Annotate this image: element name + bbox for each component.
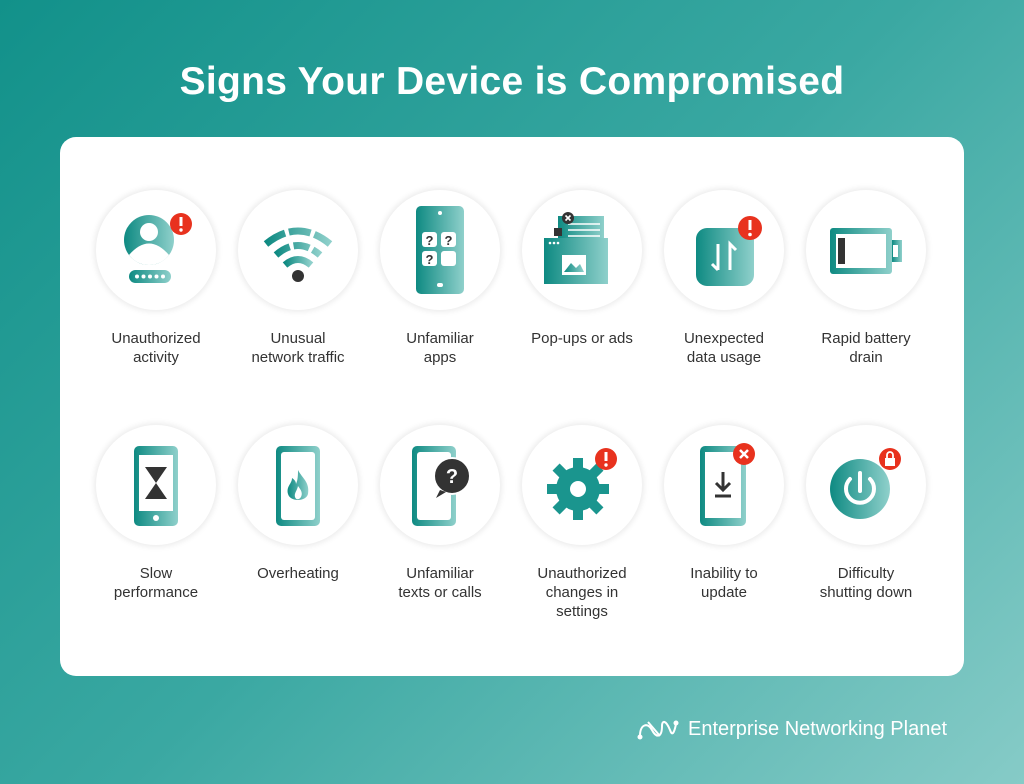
- item: difficulty shutting down: [804, 422, 928, 601]
- item: slow performance: Slow: [140, 565, 172, 582]
- item: unfamiliar apps: apps: [424, 349, 456, 366]
- logo: Enterprise Networking Planet: [688, 718, 947, 740]
- item: unexpected data usage: [662, 188, 786, 366]
- item: slow performance: [94, 422, 218, 601]
- item: unusual network traffic: [236, 188, 360, 366]
- item: unexpected data usage: Unexpected: [684, 330, 764, 347]
- item: settings: [520, 422, 644, 620]
- panel: signs: [60, 137, 964, 676]
- item: unfamiliar apps: ?: [426, 252, 434, 267]
- item: pop-ups: Pop-ups or ads: [531, 330, 633, 347]
- item: unexpected data usage: data usage: [687, 349, 761, 366]
- item: unusual network traffic: Unusual: [270, 330, 326, 347]
- item: overheating: Overheating: [257, 565, 339, 582]
- item: unfamiliar apps: ?: [426, 233, 434, 248]
- item: overheating: [236, 422, 360, 582]
- item: settings: settings: [556, 603, 608, 620]
- item: battery drain: [804, 188, 928, 366]
- item: unfamiliar texts: ?: [446, 466, 458, 488]
- item: inability to update: Inability to: [690, 565, 758, 582]
- item: inability to update: update: [701, 584, 747, 601]
- item: inability to update: [662, 422, 786, 601]
- item: slow performance: performance: [114, 584, 198, 601]
- item: difficulty shutting down: shutting down: [820, 584, 912, 601]
- item: unfamiliar texts: texts or calls: [398, 584, 482, 601]
- item: unauthorized activity: [94, 188, 218, 366]
- item: battery drain: Rapid battery: [821, 330, 911, 347]
- item: difficulty shutting down: Difficulty: [838, 565, 894, 582]
- item: unauthorized activity: activity: [133, 349, 179, 366]
- item: unfamiliar apps: [378, 188, 502, 366]
- item: unfamiliar texts: [378, 422, 502, 601]
- item: unfamiliar texts: Unfamiliar: [406, 565, 474, 582]
- item: unusual network traffic: network traffic: [251, 349, 345, 366]
- title: Signs Your Device is Compromised: [180, 60, 844, 103]
- item: unfamiliar apps: ?: [445, 233, 453, 248]
- item: settings: changes in: [546, 584, 618, 601]
- item: pop-ups: [520, 188, 644, 347]
- item: unfamiliar apps: Unfamiliar: [406, 330, 474, 347]
- item: battery drain: drain: [849, 349, 883, 366]
- item: settings: Unauthorized: [537, 565, 627, 582]
- item: unauthorized activity: Unauthorized: [111, 330, 201, 347]
